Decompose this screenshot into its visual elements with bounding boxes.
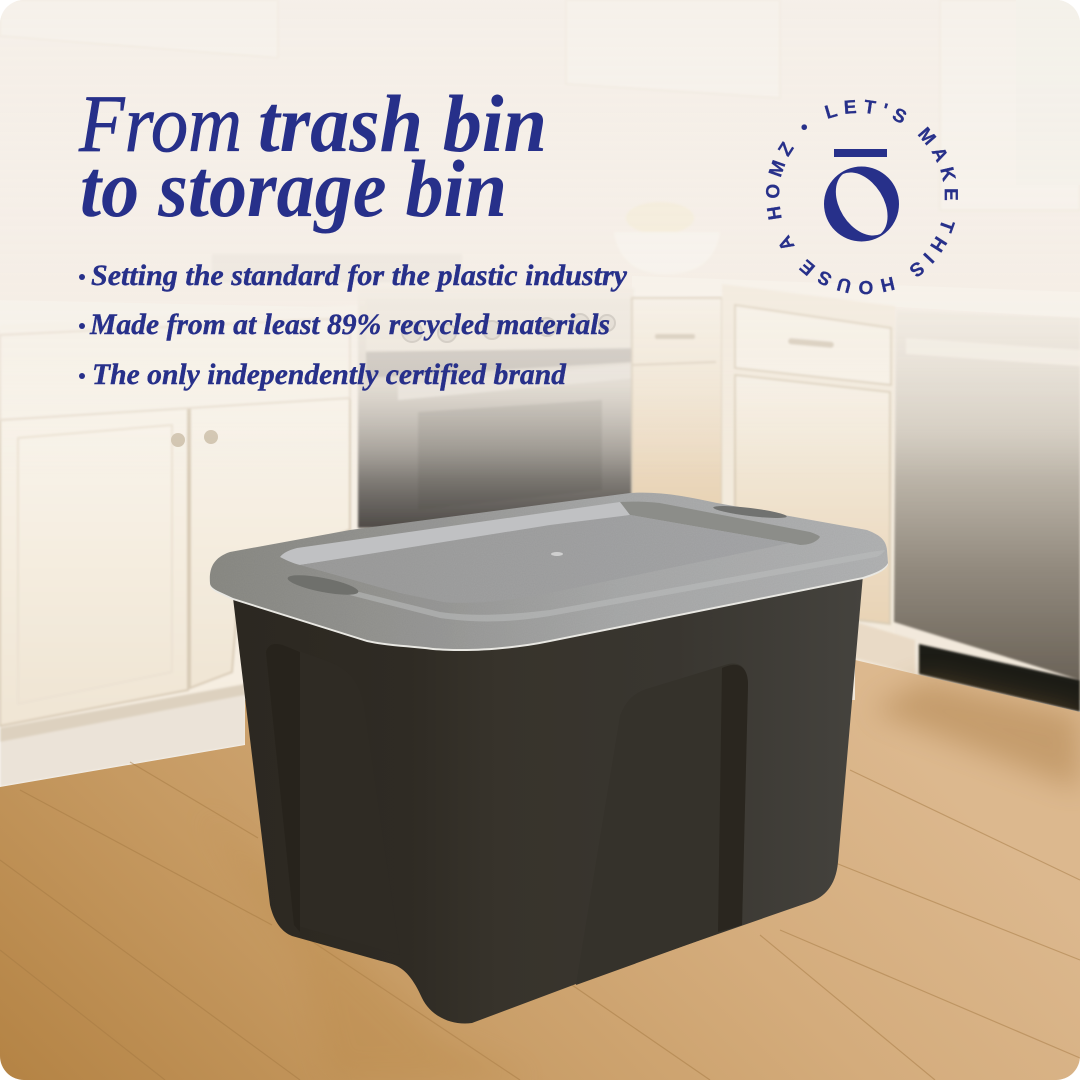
- storage bin: [210, 493, 888, 1023]
- logo mark: o with macron: [824, 149, 899, 242]
- lid tray floor: [300, 515, 790, 603]
- bin lid: [210, 493, 888, 651]
- left recess: [266, 644, 400, 955]
- badge ring text: LET'S MAKE THIS HOUSE A HOMZ •: [766, 100, 958, 294]
- wood floor: [0, 660, 1080, 1080]
- headline: From: [78, 78, 242, 169]
- headline: [78, 78, 547, 234]
- right recess: [576, 664, 748, 985]
- dishwasher: [894, 310, 1080, 712]
- countertop: [0, 276, 1080, 330]
- lid front ridge: [330, 550, 885, 622]
- right handle: [713, 506, 787, 518]
- left base cabinets: [0, 305, 360, 787]
- bullet one: Setting the standard for the plastic industry: [91, 259, 628, 292]
- lid tray rim: [280, 502, 630, 565]
- bullet three: The only independently certified brand: [92, 358, 567, 391]
- left handle: [288, 575, 358, 595]
- stove and oven: [356, 310, 632, 529]
- window pane: [1016, 0, 1080, 185]
- headline: to storage bin: [80, 143, 507, 234]
- bullet list: [79, 259, 628, 391]
- headline: trash bin: [258, 78, 547, 169]
- wall: [0, 0, 1080, 700]
- planks: [0, 762, 1080, 1080]
- bullet two: Made from at least 89% recycled materials: [89, 308, 610, 341]
- lid tray inner wall: [620, 502, 820, 545]
- upper cabinets: [0, 0, 1080, 210]
- right cabinets: [632, 284, 915, 674]
- lid centre mark: [551, 552, 563, 556]
- bin body: [233, 575, 863, 1023]
- fruit bowl: [627, 203, 693, 231]
- light wash over upper scene: [0, 0, 1080, 480]
- circular badge: [766, 100, 958, 294]
- stove knobs: [402, 314, 615, 342]
- cabinet knobs: [171, 430, 218, 447]
